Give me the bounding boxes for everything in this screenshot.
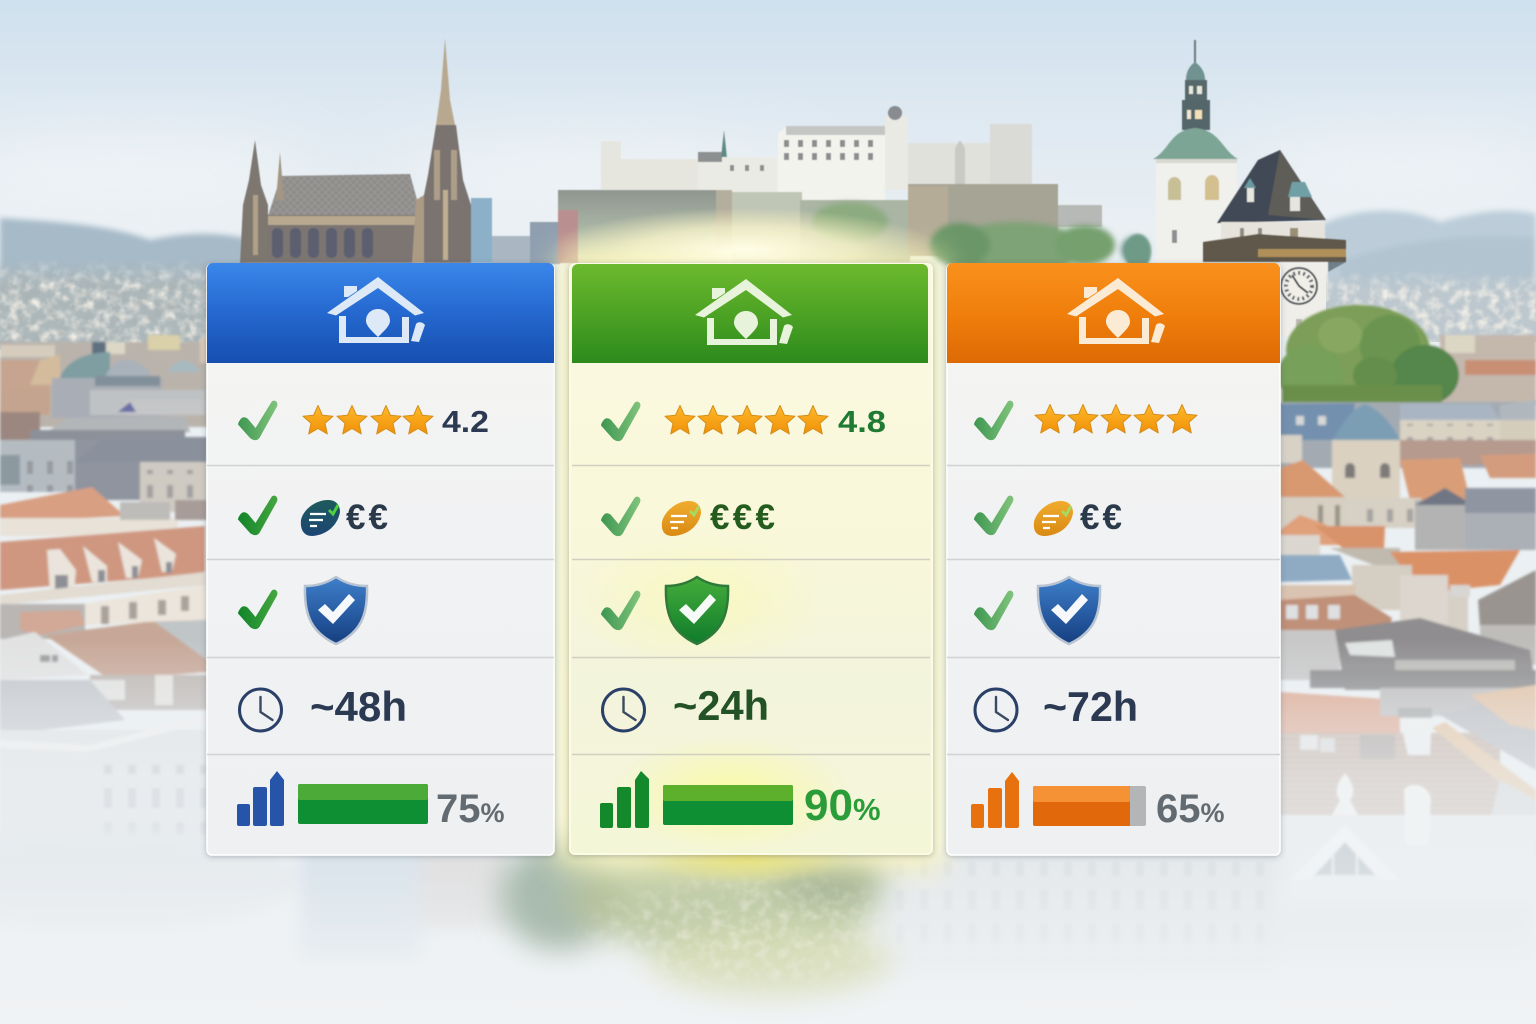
icon: price tag [1034, 501, 1073, 536]
score row blue [237, 771, 505, 831]
row dividers green [572, 466, 930, 754]
insurance row orange [974, 577, 1100, 644]
icon: house with pin, blue card [327, 277, 425, 343]
score value: 75% [436, 787, 505, 831]
icon: shield [1038, 577, 1100, 644]
score value: 65% [1156, 787, 1225, 831]
green card header [572, 264, 928, 363]
insurance row green [601, 577, 728, 644]
time value: ~24h [673, 682, 769, 729]
check [601, 497, 640, 536]
panel: orange card [947, 263, 1280, 855]
rating value: 4.8 [838, 404, 886, 439]
icon: house with pin, green card [695, 279, 793, 345]
landmark: gothic cathedral [240, 38, 560, 264]
icon: bars [237, 771, 284, 826]
background: fog overlay [0, 640, 1536, 1024]
background: right hillside city [1326, 270, 1536, 342]
panel: blue card [207, 263, 554, 855]
background: foreground building windows [885, 862, 1280, 962]
green card highlights [570, 530, 850, 853]
panel: green highlighted card [570, 264, 932, 854]
price row orange [974, 496, 1122, 537]
icon: bars [600, 771, 649, 828]
progress bar 90 [663, 785, 793, 825]
time value: ~72h [1043, 683, 1138, 730]
four stars [303, 406, 433, 434]
insurance row blue [238, 577, 367, 644]
blue card header [207, 263, 554, 363]
time value: ~48h [310, 683, 407, 730]
check [974, 401, 1013, 440]
check [238, 496, 277, 535]
icon: price tag [301, 500, 340, 536]
blue card body [207, 264, 554, 855]
progress bar 75 [298, 784, 428, 824]
check [601, 591, 640, 630]
row dividers orange [947, 466, 1280, 754]
response time row blue [240, 683, 407, 731]
background: clouds [0, 130, 1536, 210]
icon: bars [971, 772, 1019, 828]
background: foreground buildings [0, 830, 1536, 980]
icon: shield [666, 577, 728, 644]
background: tree beside tower [1125, 234, 1151, 270]
price level: €€ [346, 498, 388, 537]
check [238, 590, 277, 629]
background: fortress trees [812, 202, 1149, 274]
price row blue [238, 496, 388, 537]
icon: clock [602, 689, 644, 731]
score value: 90% [804, 781, 881, 830]
rating row orange [974, 401, 1197, 440]
icon: shield [305, 577, 367, 644]
check [238, 401, 277, 440]
five stars [1035, 404, 1197, 433]
glow: highlighted card halo [550, 208, 944, 884]
background: foreground foliage [500, 840, 940, 1010]
progress bar 65 [1033, 786, 1146, 826]
five stars [665, 406, 828, 434]
price level: €€€ [710, 498, 775, 537]
background: left city buildings [0, 335, 210, 840]
price level: €€ [1080, 498, 1122, 537]
icon: clock [975, 689, 1017, 731]
icon: price tag [662, 501, 701, 536]
row dividers blue [207, 466, 554, 754]
check [974, 591, 1013, 630]
landmark: hilltop fortress [558, 106, 1102, 263]
landmark: baroque church tower [1153, 40, 1238, 263]
background: left hillside city [0, 258, 210, 350]
icon: house with pin, orange card [1067, 278, 1165, 344]
score row green [600, 771, 881, 830]
landmark: clock tower [1203, 150, 1346, 337]
icon: clock [240, 689, 282, 731]
orange card body [947, 264, 1280, 855]
response time row green [602, 682, 769, 731]
rating value: 4.2 [442, 404, 489, 439]
green card body [570, 264, 932, 854]
background: foreground rooftops and finials [1280, 773, 1536, 915]
score row orange [971, 772, 1225, 831]
background: right city buildings [1280, 400, 1536, 860]
background: right trees [1278, 305, 1536, 405]
response time row orange [975, 683, 1138, 731]
check [974, 496, 1013, 535]
rating row green [601, 402, 886, 441]
price row green [601, 497, 775, 537]
rating row blue [238, 401, 489, 440]
orange card header [947, 263, 1280, 363]
check [601, 402, 640, 441]
background: distant mountains [0, 211, 1536, 310]
